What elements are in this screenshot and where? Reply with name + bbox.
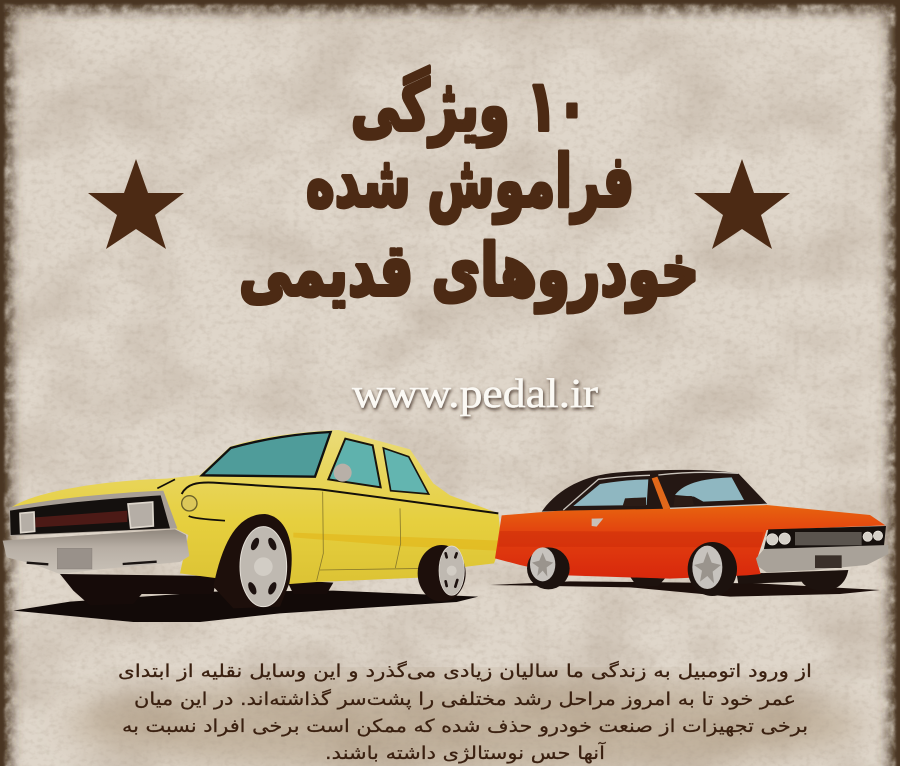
red car side shading — [498, 531, 763, 547]
yellow car underbody and front tyre — [60, 574, 333, 605]
yellow car rear side window — [383, 448, 429, 494]
yellow car body — [10, 430, 502, 584]
red car door handle — [592, 518, 603, 527]
red car — [490, 470, 888, 597]
red car body — [495, 505, 885, 579]
icon: right star — [694, 159, 790, 249]
red car grille — [763, 526, 886, 552]
paragraph line 1: از ورود اتومبیل به زندگی ما سالیان زیادی می‌گذرد و این وسایل نقلیه از ابتدای — [118, 660, 812, 682]
red car licence plate — [815, 555, 842, 568]
yellow car mirror — [334, 464, 352, 482]
red car side window — [573, 479, 648, 506]
intro paragraph — [118, 660, 812, 764]
red car shadow — [490, 581, 880, 597]
yellow car grille — [9, 491, 177, 536]
title line 3: خودروهای قدیمی — [239, 228, 699, 313]
yellow car — [3, 430, 502, 622]
yellow car door lines — [317, 492, 430, 581]
yellow car front wheel — [213, 514, 292, 608]
yellow car bumper slots — [27, 562, 157, 564]
paragraph line 2: عمر خود تا به امروز مراحل رشد مختلفی را پشت‌سر گذاشته‌اند. در این میان — [134, 688, 796, 710]
paragraph line 4: آنها حس نوستالژی داشته باشند. — [325, 741, 606, 764]
yellow car bumper — [3, 529, 189, 574]
red car roof — [542, 470, 767, 512]
title — [239, 65, 699, 313]
yellow car windshield — [202, 432, 331, 477]
red car rear wheel — [527, 547, 570, 589]
paragraph line 3: برخی تجهیزات از صنعت خودرو حذف شده که ممکن است برخی افراد نسبت به — [122, 716, 808, 737]
red car windshield — [675, 477, 744, 502]
red car bumper — [756, 545, 888, 572]
yellow car side band — [293, 533, 500, 551]
title line 2: فراموش شده — [306, 139, 634, 224]
yellow car lower trim — [157, 479, 225, 521]
website url: www.pedal.ir — [352, 370, 598, 416]
red car front wheel — [688, 542, 737, 596]
yellow car headlights — [20, 502, 153, 533]
red car far wheels — [630, 570, 848, 591]
red car A pillar — [652, 477, 671, 509]
yellow car front side window — [328, 439, 381, 487]
yellow car front light ring — [182, 496, 197, 511]
red car roof trim — [563, 472, 767, 510]
red car headlights — [767, 531, 883, 545]
red car seats — [623, 496, 694, 507]
yellow car shadow — [13, 591, 478, 622]
icon: left star — [88, 159, 184, 249]
yellow car belt stripe — [182, 483, 498, 513]
title line 1: ۱۰ ویژگی — [351, 65, 587, 147]
yellow car licence plate — [57, 548, 92, 569]
yellow car rear wheel — [418, 545, 466, 602]
